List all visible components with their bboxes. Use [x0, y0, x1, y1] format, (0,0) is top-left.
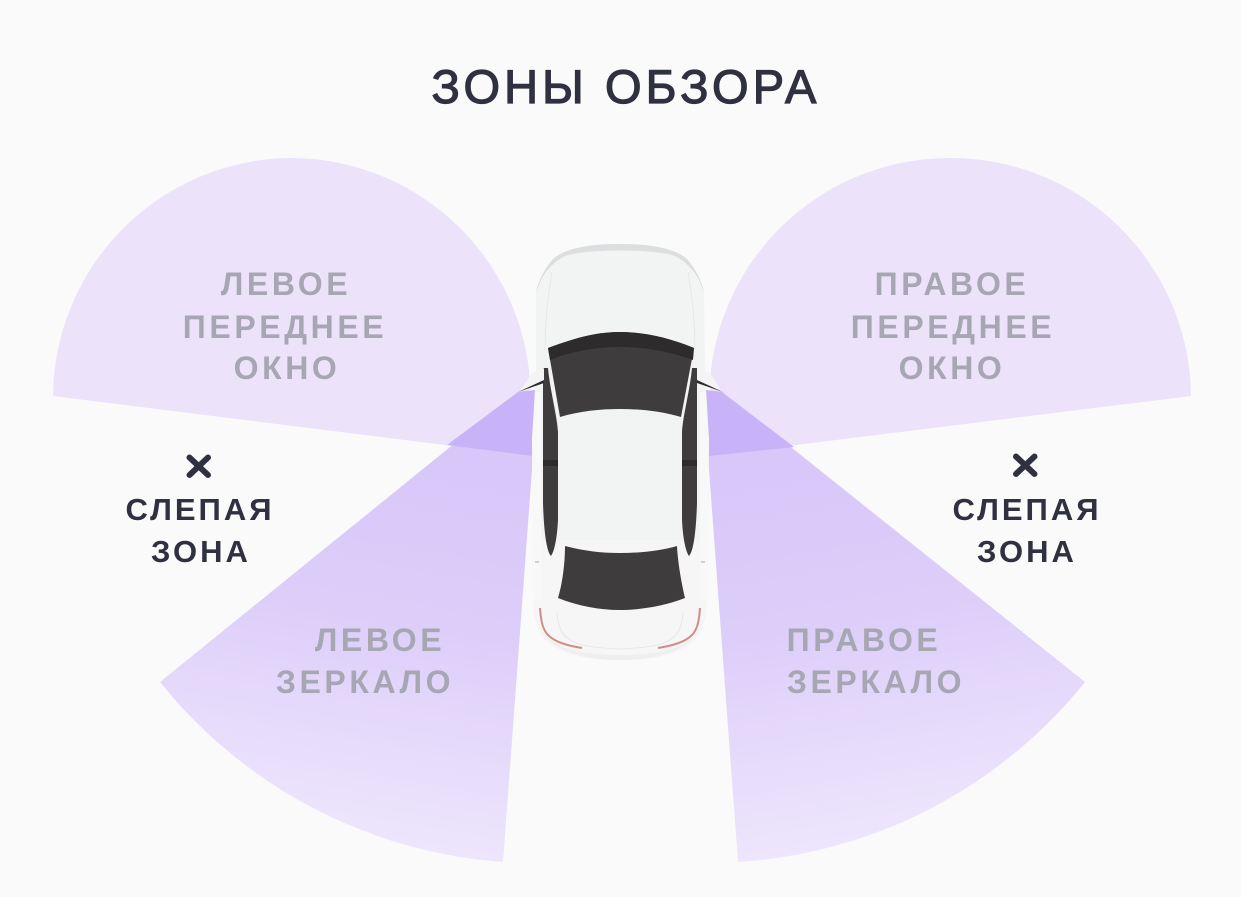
title: ЗОНЫ ОБЗОРА — [432, 60, 820, 113]
overlap: right window and mirror — [706, 390, 794, 456]
label: right blind zone — [952, 492, 1102, 569]
icon: right blind zone cross — [1016, 456, 1034, 474]
windshield top band — [548, 332, 694, 360]
label: right blind zone: ЗОНА — [977, 534, 1077, 569]
label: right front window: ОКНО — [899, 350, 1005, 386]
label: left front window: ЛЕВОЕ — [221, 266, 351, 302]
left mirror — [519, 368, 544, 392]
label: left mirror: ЛЕВОЕ — [315, 622, 445, 658]
left side window — [543, 368, 558, 556]
car roof rim — [536, 244, 704, 292]
label: left blind zone — [126, 492, 274, 569]
label: left front window — [183, 266, 387, 386]
label: right mirror: ЗЕРКАЛО — [787, 664, 965, 700]
left window pillar — [543, 460, 558, 466]
car side strips — [532, 392, 709, 600]
car body — [532, 244, 709, 660]
side markers — [535, 561, 705, 563]
label: left front window: ПЕРЕДНЕЕ — [183, 309, 387, 345]
label: right blind zone: СЛЕПАЯ — [952, 492, 1102, 527]
label: left mirror — [276, 622, 454, 700]
label: right mirror — [787, 622, 965, 700]
right mirror — [697, 368, 722, 392]
icon: left blind zone cross — [190, 458, 208, 475]
zone: left front window — [53, 158, 533, 456]
label: left mirror: ЗЕРКАЛО — [276, 664, 454, 700]
left tail light — [540, 608, 582, 648]
label: right front window: ПЕРЕДНЕЕ — [851, 309, 1055, 345]
zone: left mirror — [160, 390, 535, 862]
label: right mirror: ПРАВОЕ — [787, 622, 941, 658]
overlap: left window and mirror — [447, 390, 535, 456]
label: left blind zone: СЛЕПАЯ — [126, 492, 274, 527]
car lower lip — [534, 605, 706, 660]
rear window — [558, 546, 685, 610]
label: right front window — [851, 266, 1055, 386]
right tail light — [658, 608, 700, 648]
car seams — [545, 272, 695, 649]
car — [518, 244, 723, 660]
label: right front window: ПРАВОЕ — [875, 266, 1029, 302]
right mirror underside — [697, 380, 723, 392]
label: left blind zone: ЗОНА — [151, 534, 251, 569]
car lower body — [532, 540, 708, 660]
zone: right front window — [707, 158, 1191, 456]
right side window — [682, 368, 697, 556]
left mirror underside — [518, 380, 544, 392]
windshield — [548, 332, 694, 417]
zone: right mirror — [706, 390, 1085, 862]
right window pillar — [682, 460, 697, 466]
label: left front window: ОКНО — [234, 350, 340, 386]
